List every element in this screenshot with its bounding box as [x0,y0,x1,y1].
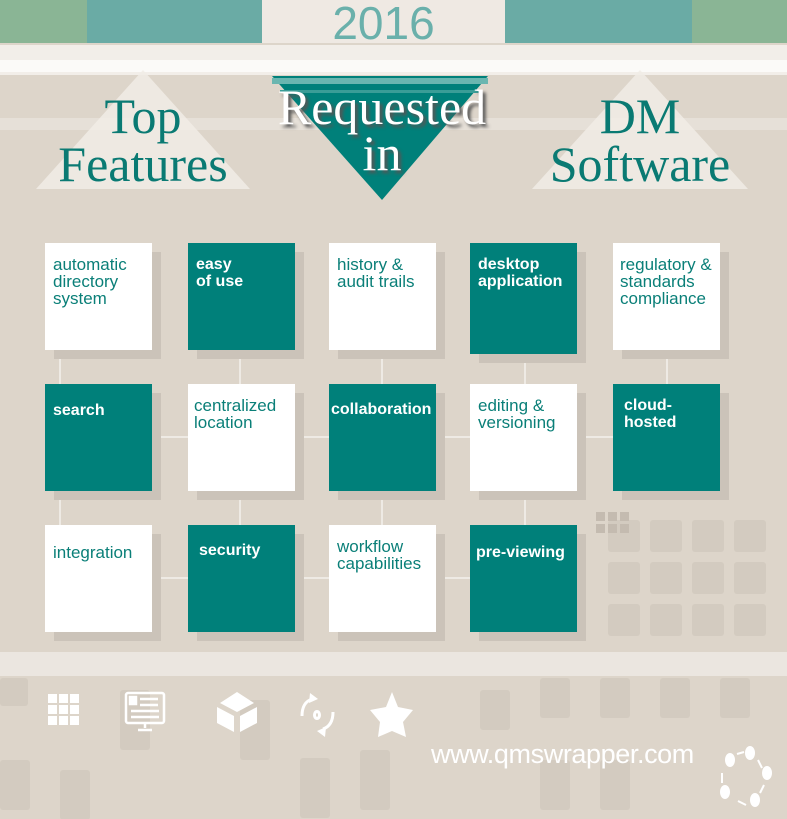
box: workflow capabilities [329,525,436,632]
icons row [48,692,413,737]
icon: sync [302,699,333,729]
box: search: search [53,402,105,419]
box: security: security [199,542,260,559]
box: cloud-hosted [613,384,720,491]
title: DM Software [550,88,730,192]
box: workflow capabilities: workflow capabilities [337,537,421,573]
icon: monitor [126,693,164,730]
box: desktop application: desktop application [478,256,562,290]
box: history & audit trails [329,243,436,350]
box: editing & versioning: versioning [478,413,556,432]
title: DM Software: Software [550,136,730,192]
box: editing & versioning: editing & [478,396,544,415]
box: pre-viewing [470,525,577,632]
icon: star [370,692,413,737]
box: automatic directory system: automatic directory system [53,255,127,308]
box: integration [45,525,152,632]
box: centralized location: centralized location [194,396,276,432]
feature boxes [45,243,729,641]
title: DM Software: DM [600,88,680,144]
box: security [188,525,295,632]
box: easy of use [188,243,295,350]
box: integration: integration [53,543,132,562]
box: history & audit trails: audit trails [337,272,414,291]
title triangles [36,70,748,200]
box: cloud-hosted: cloud- [624,397,672,414]
box: history & audit trails: history & [337,255,403,274]
title: Requested in: in [363,125,401,181]
box: search [45,384,152,491]
box: cloud-hosted: hosted [624,414,676,431]
icon: cube [217,692,257,732]
box: regulatory & standards compliance: regulatory & standards compliance [620,255,712,308]
title: Requested in [278,79,490,181]
box: automatic directory system [45,243,152,350]
box: editing & versioning [470,384,577,491]
title: Top Features [58,88,228,192]
icon: grid [48,694,79,725]
box: regulatory & standards compliance [613,243,720,350]
logo: ring of dots [720,746,772,807]
box: collaboration [329,384,436,491]
box: pre-viewing: pre-viewing [476,544,565,561]
box: easy of use: easy [196,256,232,273]
box: centralized location [188,384,295,491]
title: Top Features: Features [58,136,228,192]
top banner [0,0,787,49]
title: Top Features: Top [104,88,182,144]
website url: www.qmswrapper.com [431,739,694,769]
box: easy of use: of use [196,273,243,290]
box: desktop application [470,243,577,354]
title: Requested in: Requested [278,79,486,135]
box: collaboration: collaboration [331,401,431,418]
